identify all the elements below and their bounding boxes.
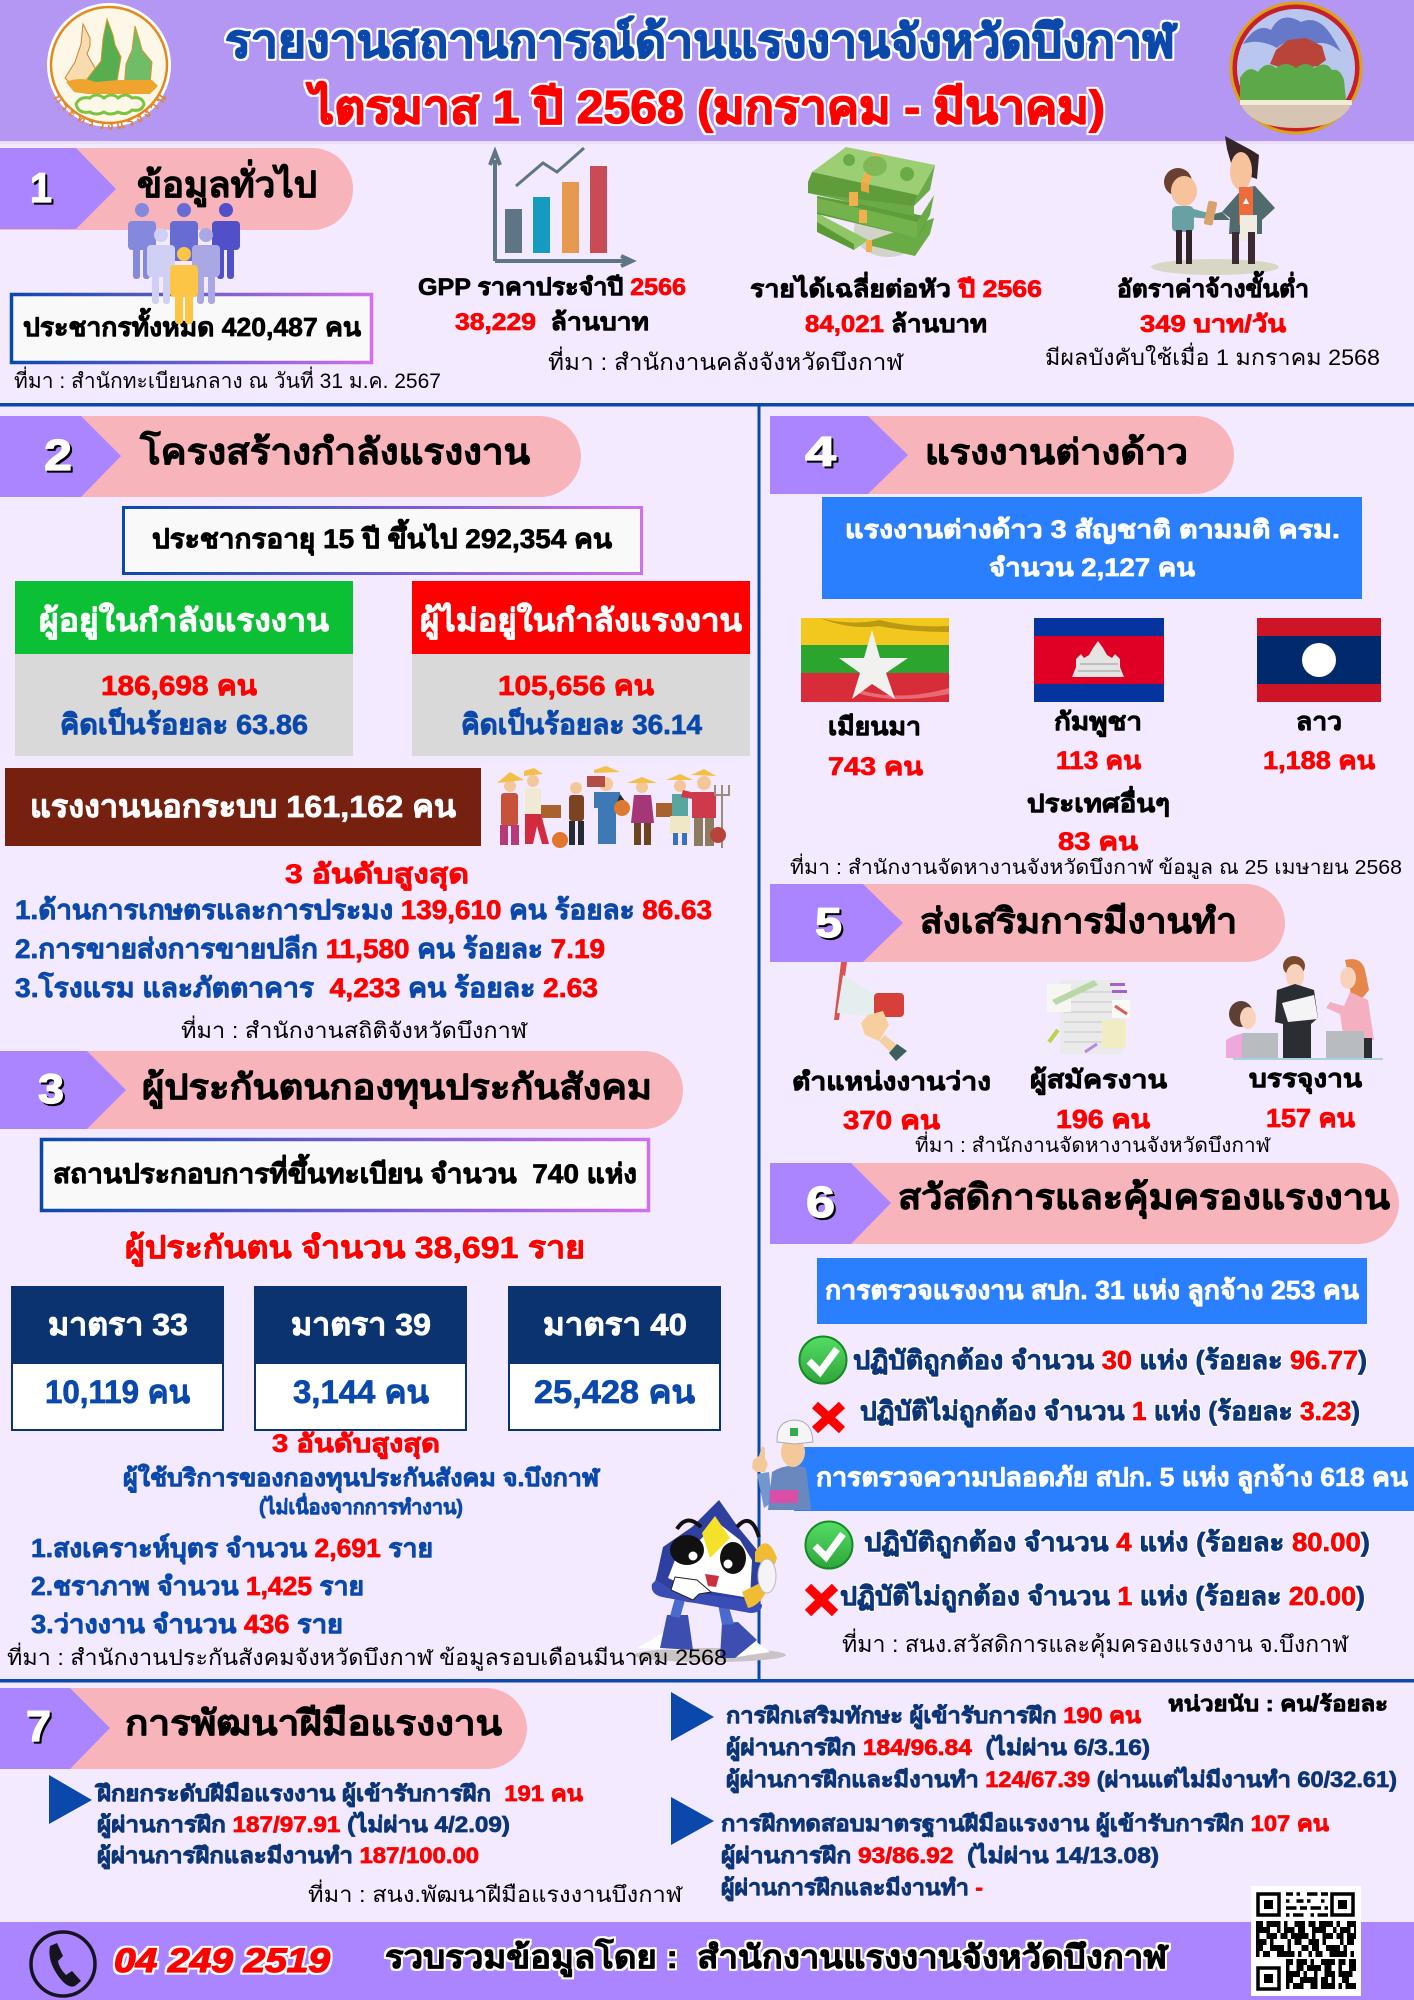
icon: triangle arrow C xyxy=(671,1797,714,1845)
skill standard testing text: การฝึกทดสอบมาตรฐานฝีมือแรงงาน ผู้เข้ารับการฝึก 107 คน xyxy=(721,1811,1329,1838)
foreign worker counts: 83 คน xyxy=(1058,828,1138,856)
heading banner 3: 3 xyxy=(38,1065,64,1112)
skill enhancement training text: การฝึกเสริมทักษะ ผู้เข้ารับการฝึก 190 คน xyxy=(726,1703,1141,1730)
heading banner 4: 4 xyxy=(805,428,837,475)
population age 15+ box xyxy=(124,508,642,574)
insured persons total: ผู้ประกันตน จำนวน 38,691 ราย xyxy=(125,1230,585,1267)
foreign worker counts: 1,188 คน xyxy=(1263,747,1375,775)
skill enhancement training text: ผู้ผ่านการฝึก 184/96.84 (ไม่ผ่าน 6/3.16) xyxy=(726,1734,1150,1762)
employment figures: บรรจุงาน xyxy=(1249,1065,1362,1095)
section 33 card: มาตรา 33 xyxy=(48,1307,188,1342)
section 33 card: 10,119 คน xyxy=(45,1374,190,1410)
not in labour force card: คิดเป็นร้อยละ 36.14 xyxy=(461,707,702,740)
minimum wage text: 349 บาท/วัน xyxy=(1140,311,1287,338)
foreign workers total box: แรงงานต่างด้าว 3 สัญชาติ ตามมติ ครม. xyxy=(845,516,1340,544)
heading banner 3 xyxy=(0,1051,683,1129)
minimum wage text: มีผลบังคับใช้เมื่อ 1 มกราคม 2568 xyxy=(1045,342,1380,370)
employment figures: ผู้สมัครงาน xyxy=(1030,1066,1167,1096)
foreign worker counts: ประเทศอื่นๆ xyxy=(1027,786,1170,818)
labour inspection non-compliant: ปฏิบัติไม่ถูกต้อง จำนวน 1 แห่ง (ร้อยละ 3.23) xyxy=(860,1395,1360,1428)
icon: two men handshake xyxy=(1151,136,1279,275)
footer band xyxy=(0,1922,1414,2000)
safety inspection compliant: ปฏิบัติถูกต้อง จำนวน 4 แห่ง (ร้อยละ 80.00) xyxy=(864,1527,1370,1559)
logo: Bueng Kan province seal xyxy=(1231,3,1361,133)
not in labour force card: 105,656 คน xyxy=(498,670,654,701)
icon: people group xyxy=(128,203,240,324)
informal workers banner: แรงงานนอกระบบ 161,162 คน xyxy=(30,789,456,824)
panel: 1 general information xyxy=(0,136,1380,393)
QR code xyxy=(1251,1886,1361,1996)
heading banner 1 xyxy=(0,148,353,230)
in labour force card: คิดเป็นร้อยละ 63.86 xyxy=(60,707,308,740)
title xyxy=(225,15,1178,133)
GPP text: 38,229 ล้านบาท xyxy=(455,309,649,336)
panel: 6 welfare and labour protection xyxy=(752,1163,1414,1658)
GPP text xyxy=(418,274,686,336)
icon: cross mark 1 xyxy=(815,1405,842,1430)
GPP text: GPP ราคาประจำปี 2566 xyxy=(418,274,686,301)
source: employment office: ที่มา : สำนักงานจัดหางานจังหวัดบึงกาฬ ข้อมูล ณ 25 เมษายน 2568 xyxy=(790,853,1402,880)
skill standard testing text: ผู้ผ่านการฝึก 93/86.92 (ไม่ผ่าน 14/13.08) xyxy=(721,1842,1159,1870)
top 3 benefits list: 3.ว่างงาน จำนวน 436 ราย xyxy=(31,1609,343,1639)
top 3 list: 3 อันดับสูงสุด xyxy=(285,859,469,891)
average income text xyxy=(750,271,1042,338)
top 3 benefits list: (ไม่เนื่องจากการทำงาน) xyxy=(259,1492,463,1519)
labour inspection compliant: ปฏิบัติถูกต้อง จำนวน 30 แห่ง (ร้อยละ 96.77) xyxy=(853,1345,1367,1377)
foreign worker counts xyxy=(828,708,1375,856)
flag: Myanmar xyxy=(801,618,949,702)
labour inspection box xyxy=(817,1258,1367,1324)
top 3 list: 2.การขายส่งการขายปลีก 11,580 คน ร้อยละ 7.19 xyxy=(15,934,605,964)
heading banner 6: 6 xyxy=(806,1178,835,1227)
employment figures: 157 คน xyxy=(1266,1103,1355,1133)
section 40 card: 25,428 คน xyxy=(534,1374,695,1410)
header band xyxy=(0,0,1414,144)
section 39 card: มาตรา 39 xyxy=(291,1307,431,1342)
flag: Cambodia xyxy=(1034,618,1164,702)
logo: ministry of labour seal xyxy=(47,3,171,130)
skill standard testing text xyxy=(721,1811,1329,1902)
minimum wage text xyxy=(1045,270,1380,370)
icon: check mark 1 xyxy=(800,1336,846,1384)
icon: megaphone xyxy=(834,962,907,1061)
labour inspection box: การตรวจแรงงาน สปก. 31 แห่ง ลูกจ้าง 253 คน xyxy=(825,1275,1359,1307)
skill upgrade training text: ผู้ผ่านการฝึกและมีงานทำ 187/100.00 xyxy=(97,1843,479,1870)
icon: bar chart xyxy=(490,148,632,266)
unit note: หน่วยนับ : คน/ร้อยละ xyxy=(1168,1692,1388,1716)
source: treasury office: ที่มา : สำนักงานคลังจังหวัดบึงกาฬ xyxy=(548,346,904,375)
foreign worker counts: 113 คน xyxy=(1056,747,1141,775)
population age 15+ box: ประชากรอายุ 15 ปี ขึ้นไป 292,354 คน xyxy=(152,518,613,556)
top 3 benefits list: 1.สงเคราะห์บุตร จำนวน 2,691 ราย xyxy=(31,1533,433,1565)
total population box: ประชากรทั้งหมด 420,487 คน xyxy=(23,307,361,342)
not in labour force card xyxy=(412,581,750,756)
section 40 card xyxy=(508,1286,721,1430)
source: skills office: ที่มา : สนง.พัฒนาฝีมือแรงงานบึงกาฬ xyxy=(308,1879,683,1907)
icon: triangle arrow B xyxy=(671,1692,714,1741)
foreign workers total box: จำนวน 2,127 คน xyxy=(989,554,1195,582)
heading banner 4 xyxy=(770,416,1234,494)
heading banner 5: 5 xyxy=(815,899,842,946)
heading banner 1: ข้อมูลทั่วไป xyxy=(137,159,317,208)
flag: Laos xyxy=(1257,618,1381,702)
heading banner 5 xyxy=(770,884,1285,962)
employment figures xyxy=(792,1065,1362,1135)
phone number: 04 249 2519 xyxy=(114,1942,330,1980)
icon: meeting people xyxy=(1226,956,1383,1060)
section 40 card: มาตรา 40 xyxy=(543,1307,687,1342)
heading banner 3: ผู้ประกันตนกองทุนประกันสังคม xyxy=(142,1068,652,1109)
heading banner 7: 7 xyxy=(26,1702,51,1751)
top 3 list: 1.ด้านการเกษตรและการประมง 139,610 คน ร้อยละ 86.63 xyxy=(15,895,712,925)
source: statistics office: ที่มา : สำนักงานสถิติจังหวัดบึงกาฬ xyxy=(181,1015,528,1043)
in labour force card: 186,698 คน xyxy=(101,670,257,701)
section 39 card: 3,144 คน xyxy=(293,1374,429,1410)
in labour force card: ผู้อยู่ในกำลังแรงงาน xyxy=(39,602,329,640)
safety inspection box xyxy=(794,1447,1414,1511)
not in labour force card: ผู้ไม่อยู่ในกำลังแรงงาน xyxy=(420,602,742,640)
skill upgrade training text xyxy=(94,1781,583,1870)
source: social security: ที่มา : สำนักงานประกันสังคมจังหวัดบึงกาฬ ข้อมูลรอบเดือนมีนาคม 2568 xyxy=(7,1642,727,1671)
icon: safety worker xyxy=(752,1420,813,1510)
safety inspection box: การตรวจความปลอดภัย สปก. 5 แห่ง ลูกจ้าง 618 คน xyxy=(816,1462,1408,1494)
heading banner 2: 2 xyxy=(44,431,72,480)
section 33 card xyxy=(11,1286,224,1430)
icon: telephone xyxy=(31,1932,95,1996)
skill standard testing text: ผู้ผ่านการฝึกและมีงานทำ - xyxy=(721,1875,983,1902)
in labour force card xyxy=(15,581,353,756)
minimum wage text: อัตราค่าจ้างขั้นต่ำ xyxy=(1117,270,1309,303)
heading banner 2 xyxy=(0,416,581,497)
foreign workers total box xyxy=(822,497,1362,599)
heading banner 6 xyxy=(770,1163,1399,1244)
registered establishments box: สถานประกอบการที่ขึ้นทะเบียน จำนวน 740 แห่ง xyxy=(53,1153,637,1189)
section 39 card xyxy=(254,1286,467,1430)
foreign worker counts: ลาว xyxy=(1296,708,1342,736)
mascot xyxy=(634,1500,786,1662)
panel: 3 social security xyxy=(0,1051,786,1671)
panel: 2 labour force structure xyxy=(0,416,750,1043)
heading banner 4: แรงงานต่างด้าว xyxy=(925,433,1188,472)
top 3 benefits list xyxy=(31,1430,601,1639)
icon: cross mark 2 xyxy=(808,1587,835,1613)
icon: farmers group xyxy=(497,766,729,848)
panel: 4 foreign workers xyxy=(770,416,1402,880)
foreign worker counts: กัมพูชา xyxy=(1054,708,1142,738)
source: population: ที่มา : สำนักทะเบียนกลาง ณ วันที่ 31 ม.ค. 2567 xyxy=(14,366,441,393)
source: employment office 2: ที่มา : สำนักงานจัดหางานจังหวัดบึงกาฬ xyxy=(915,1131,1271,1157)
employment figures: 196 คน xyxy=(1056,1104,1150,1134)
average income text: 84,021 ล้านบาท xyxy=(805,311,987,338)
top 3 list: 3.โรงแรม และภัตตาคาร 4,233 คน ร้อยละ 2.63 xyxy=(15,971,598,1003)
heading banner 2: โครงสร้างกำลังแรงงาน xyxy=(139,430,530,472)
employment figures: ตำแหน่งงานว่าง xyxy=(792,1068,991,1096)
panel: 5 employment promotion xyxy=(770,884,1383,1157)
heading banner 6: สวัสดิการและคุ้มครองแรงงาน xyxy=(898,1178,1390,1219)
top 3 benefits list: ผู้ใช้บริการของกองทุนประกันสังคม จ.บึงกาฬ xyxy=(123,1463,601,1494)
total population box xyxy=(12,294,372,362)
source: welfare office: ที่มา : สนง.สวัสดิการและคุ้มครองแรงงาน จ.บึงกาฬ xyxy=(842,1628,1349,1658)
logo: ministry of labour seal: กระทรวงแรงงาน xyxy=(54,94,166,130)
heading banner 1: 1 xyxy=(30,164,52,211)
heading banner 7 xyxy=(0,1688,527,1769)
skill upgrade training text: ผู้ผ่านการฝึก 187/97.91 (ไม่ผ่าน 4/2.09) xyxy=(97,1811,510,1839)
title: ไตรมาส 1 ปี 2568 (มกราคม - มีนาคม) xyxy=(305,81,1105,133)
registered establishments box xyxy=(42,1140,648,1210)
top 3 benefits list: 3 อันดับสูงสุด xyxy=(272,1430,440,1460)
average income text: รายได้เฉลี่ยต่อหัว ปี 2566 xyxy=(750,271,1042,303)
foreign worker counts: เมียนมา xyxy=(828,713,921,741)
heading banner 5: ส่งเสริมการมีงานทำ xyxy=(920,902,1237,941)
foreign worker counts: 743 คน xyxy=(828,753,923,781)
employment figures: 370 คน xyxy=(843,1105,940,1135)
safety inspection non-compliant: ปฏิบัติไม่ถูกต้อง จำนวน 1 แห่ง (ร้อยละ 20.00) xyxy=(840,1580,1365,1613)
heading banner 7: การพัฒนาฝีมือแรงงาน xyxy=(125,1704,502,1743)
panel: 7 skills development xyxy=(0,1688,1397,1907)
skill enhancement training text xyxy=(726,1703,1397,1794)
icon: application papers xyxy=(1047,980,1130,1054)
informal workers banner xyxy=(5,768,481,846)
icon: triangle arrow A xyxy=(49,1775,92,1824)
icon: check mark 2 xyxy=(806,1522,852,1568)
skill upgrade training text: ฝึกยกระดับฝีมือแรงงาน ผู้เข้ารับการฝึก 191 คน xyxy=(94,1781,583,1808)
top 3 benefits list: 2.ชราภาพ จำนวน 1,425 ราย xyxy=(31,1571,364,1601)
icon: money stack xyxy=(808,147,935,257)
compiled by text: รวบรวมข้อมูลโดย : สำนักงานแรงงานจังหวัดบึงกาฬ xyxy=(385,1938,1169,1978)
top 3 list xyxy=(15,859,712,1003)
skill enhancement training text: ผู้ผ่านการฝึกและมีงานทำ 124/67.39 (ผ่านแต่ไม่มีงานทำ 60/32.61) xyxy=(726,1766,1397,1794)
title: รายงานสถานการณ์ด้านแรงงานจังหวัดบึงกาฬ xyxy=(225,15,1178,67)
